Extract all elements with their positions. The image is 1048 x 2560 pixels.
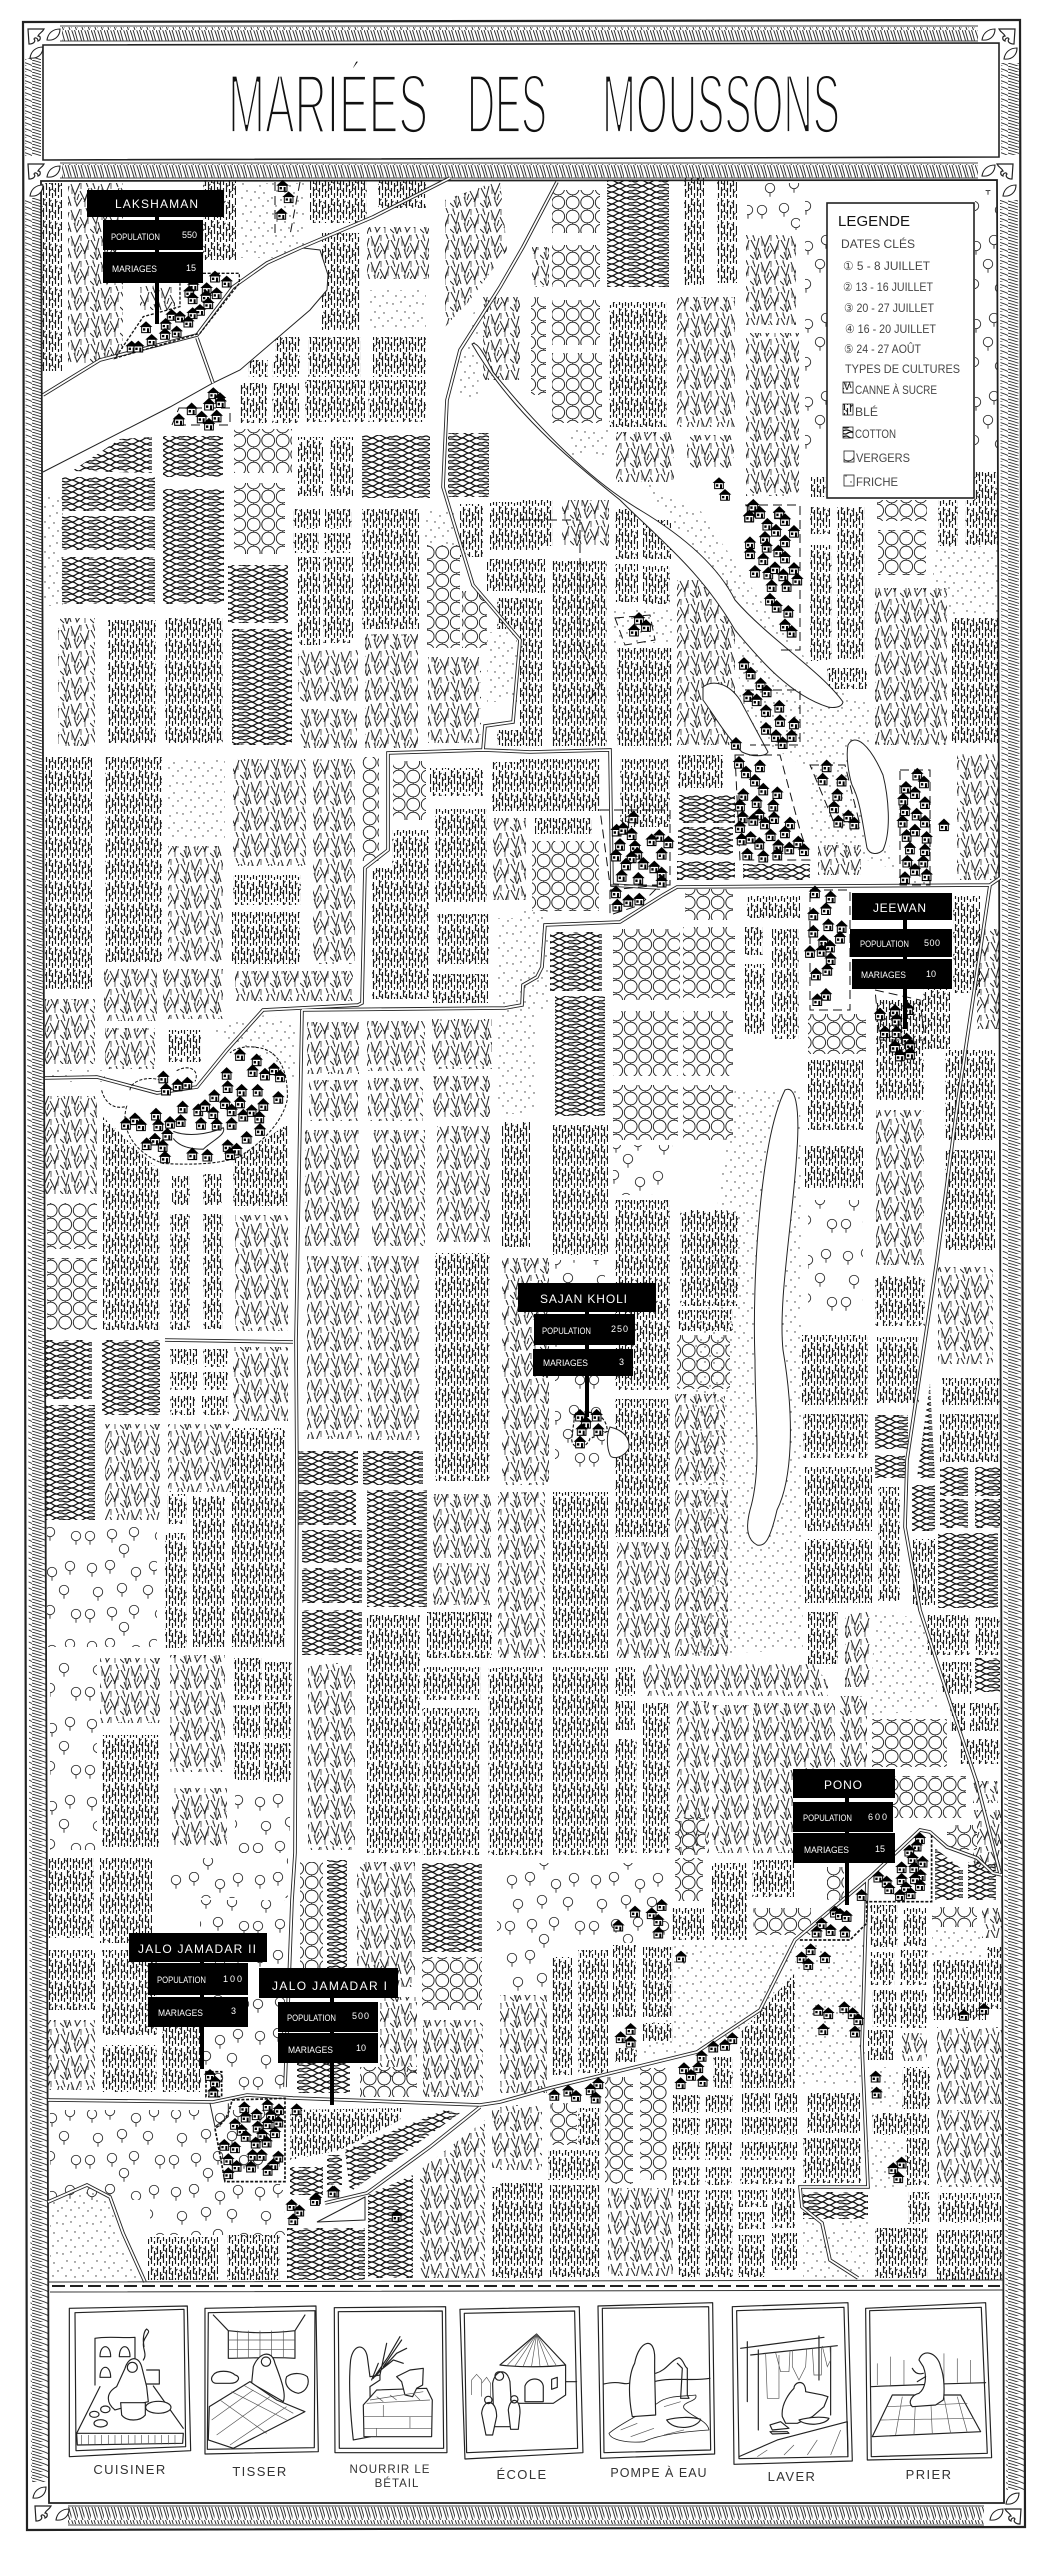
sign: Pono: 600	[868, 1812, 887, 1822]
sugar cane fields	[45, 180, 1003, 2278]
wheat fields	[42, 178, 1002, 2280]
cotton fields	[45, 180, 1000, 2280]
title: Mariées des moussons: MARIÉES	[228, 57, 428, 151]
caption: tisser: TISSER	[232, 2464, 288, 2479]
sign: Jeewan: 500	[924, 938, 940, 948]
sign: Jalo Jamadar II: POPULATION	[157, 1975, 206, 1985]
sign: Jeewan: JEEWAN	[873, 901, 926, 915]
sign: Jalo Jamadar I: JALO JAMADAR I	[272, 1979, 387, 1993]
sign: Pono: PONO	[824, 1778, 862, 1792]
title: Mariées des moussons: DES	[467, 57, 547, 151]
pond two	[847, 740, 888, 854]
sign: Jalo Jamadar I: POPULATION	[287, 2013, 336, 2023]
lake by Lakshaman	[43, 248, 328, 472]
legend crop types: BLÉ	[855, 404, 878, 419]
map: Pono houses	[548, 1832, 990, 2183]
fallow land	[43, 183, 998, 2280]
caption: nourrir le bétail: BÉTAIL	[375, 2477, 419, 2490]
sign: Jalo Jamadar II	[129, 1933, 267, 2069]
illustration: feeding cattle	[350, 2337, 432, 2440]
sign: Jalo Jamadar II: MARIAGES	[158, 2008, 203, 2018]
illustration: water pump	[604, 2343, 710, 2442]
sign: Lakshaman: 550	[182, 230, 197, 240]
map: Jalo Jamadar houses	[204, 2069, 341, 2204]
map: houses along the canal and Jeewan	[610, 499, 950, 1061]
caption: pompe à eau: POMPE À EAU	[610, 2465, 708, 2480]
sign: Pono	[793, 1769, 895, 1905]
illustration: weaving	[208, 2315, 308, 2448]
caption: nourrir le bétail	[350, 2464, 430, 2490]
sign: Sajan Kholi	[518, 1283, 656, 1417]
sign: Pono: 15	[875, 1844, 885, 1854]
map: houses north-east	[713, 477, 785, 522]
map: dashed village boundaries	[102, 182, 932, 2182]
map: houses upper left	[125, 180, 295, 404]
legend crop types: VERGERS	[856, 451, 910, 465]
sign: Jalo Jamadar I: 500	[352, 2011, 369, 2021]
dashed divider	[48, 2280, 1003, 2292]
caption: nourrir le bétail: NOURRIR LE	[350, 2464, 430, 2476]
caption: prier: PRIER	[906, 2467, 952, 2482]
sign: Jeewan	[850, 893, 952, 1029]
sign: Lakshaman: 15	[186, 263, 196, 273]
long canal	[472, 344, 843, 707]
sign: Jalo Jamadar II: 3	[231, 2006, 236, 2016]
activity panel: nourrir le bétail	[334, 2307, 447, 2453]
legend key dates: ③ 20 - 27 JUILLET	[844, 301, 935, 315]
sign: Jeewan: 10	[926, 969, 936, 979]
sign: Jalo Jamadar II: 100	[223, 1974, 242, 1984]
illustration: praying	[871, 2353, 986, 2437]
map: Sajan Kholi houses	[574, 1409, 605, 1448]
sign: Sajan Kholi: 250	[611, 1324, 628, 1334]
wedge pond	[317, 2197, 365, 2222]
legend key dates: DATES CLÉS	[841, 236, 915, 251]
legend	[827, 203, 974, 498]
map: lakes and ponds	[43, 248, 888, 2222]
sign: Lakshaman: POPULATION	[111, 232, 160, 242]
legend key dates: ⑤ 24 - 27 AOÛT	[844, 341, 922, 356]
sign: Lakshaman: MARIAGES	[112, 264, 157, 274]
sign: Jalo Jamadar II: JALO JAMADAR II	[138, 1942, 256, 1956]
sign: Jalo Jamadar I	[259, 1968, 398, 2105]
map: western village	[120, 1048, 286, 1163]
legend crop types: TYPES DE CULTURES	[845, 362, 960, 376]
legend key dates	[841, 236, 937, 356]
legend crop types: COTTON	[855, 427, 896, 441]
legend key dates: ① 5 - 8 JUILLET	[843, 259, 931, 273]
caption: cuisiner: CUISINER	[93, 2462, 167, 2477]
illustration: school	[472, 2334, 577, 2435]
sign: Pono: MARIAGES	[804, 1845, 849, 1855]
sign: Sajan Kholi: SAJAN KHOLI	[540, 1292, 627, 1306]
sign: Pono: POPULATION	[803, 1813, 852, 1823]
activity panel: cuisiner	[69, 2306, 191, 2457]
activity panel: pompe à eau	[598, 2303, 715, 2458]
activity panel: école	[460, 2307, 583, 2459]
map: crop fields	[42, 178, 1003, 2280]
activity panel: tisser	[205, 2306, 318, 2454]
map: roads	[43, 178, 1002, 2282]
sign: Jalo Jamadar I: MARIAGES	[288, 2045, 333, 2055]
map: southern hamlets	[285, 2186, 403, 2225]
title: Mariées des moussons	[228, 57, 840, 151]
orchard fields	[47, 190, 977, 2184]
sign: Sajan Kholi: MARIAGES	[543, 1358, 588, 1368]
title banner	[43, 43, 999, 160]
scattered orchards	[47, 183, 997, 2235]
sign: Sajan Kholi: POPULATION	[542, 1326, 591, 1336]
legend key dates: ④ 16 - 20 JUILLET	[845, 322, 937, 336]
sign: Lakshaman: LAKSHAMAN	[115, 197, 198, 211]
illustration: cooking	[77, 2329, 183, 2445]
legend heading: LEGENDE	[838, 213, 910, 230]
illustration: washing	[739, 2336, 848, 2457]
caption: laver: LAVER	[768, 2469, 816, 2484]
map: houses below Lakshaman	[173, 395, 227, 430]
sign: Jeewan: POPULATION	[860, 939, 909, 949]
legend key dates: ② 13 - 16 JUILLET	[843, 280, 934, 294]
activity panel: laver	[732, 2303, 852, 2464]
small pond	[607, 1427, 629, 1458]
activity panel: prier	[866, 2303, 992, 2460]
sign: Sajan Kholi: 3	[619, 1357, 624, 1367]
sign: Jalo Jamadar I: 10	[356, 2043, 366, 2053]
sign: Lakshaman	[87, 190, 224, 324]
legend crop types	[843, 362, 960, 489]
legend crop types: CANNE À SUCRE	[855, 382, 937, 397]
sign: Jeewan: MARIAGES	[861, 970, 906, 980]
caption: école: ÉCOLE	[496, 2467, 548, 2482]
legend crop types: FRICHE	[856, 475, 898, 489]
pond one	[703, 683, 768, 756]
central long lake	[748, 1089, 798, 1545]
